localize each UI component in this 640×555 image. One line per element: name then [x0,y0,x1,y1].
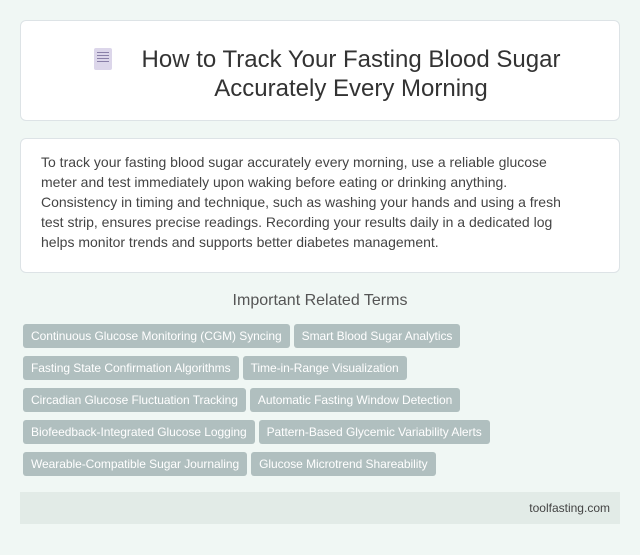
tags: Smart Blood Sugar Analytics [302,329,452,343]
heading: related terms: Important Related Terms [233,292,407,309]
footer: toolfasting.com [529,501,610,515]
tags: Circadian Glucose Fluctuation Tracking [31,393,238,407]
summary text: To track your fasting blood sugar accurately every morning, use a reliable glucose meter and test immediately upon waking before eating or drinking anything. Consistency in timing and technique, such as washing your hands and using a fresh test strip, ensures precise readings. Recording your results daily in a dedicated log helps monitor trends and supports better diabetes management. [41,154,561,250]
title panel [20,20,620,121]
tags: Automatic Fasting Window Detection [258,393,452,407]
tags: Time-in-Range Visualization [251,361,399,375]
footer [20,492,620,524]
tags: Glucose Microtrend Shareability [259,457,428,471]
title: How to Track Your Fasting Blood Sugar Accurately Every Morning [142,46,560,102]
summary text [20,138,620,273]
tags: Continuous Glucose Monitoring (CGM) Syncing [31,329,282,343]
tags: Pattern-Based Glycemic Variability Alerts [267,425,482,439]
icon: receipt [94,48,112,70]
tags: Wearable-Compatible Sugar Journaling [31,457,239,471]
tags [23,324,490,476]
tags: Biofeedback-Integrated Glucose Logging [31,425,247,439]
tags: Fasting State Confirmation Algorithms [31,361,231,375]
